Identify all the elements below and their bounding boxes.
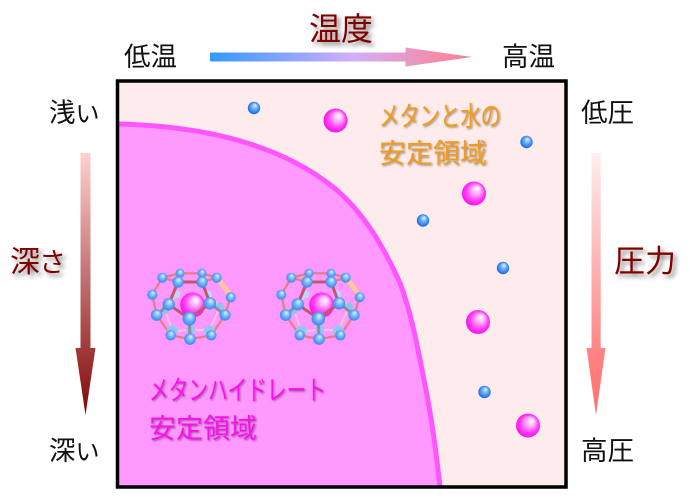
text: methane and water stable region bbox=[379, 102, 501, 169]
water molecules bbox=[248, 102, 533, 398]
text: hydrate stable region: 安定領域 bbox=[149, 414, 257, 444]
text: methane and water stable region: メタンと水の bbox=[379, 102, 501, 132]
methane molecules bbox=[324, 108, 540, 438]
label: high temperature: 高温 bbox=[502, 42, 555, 72]
label: low pressure: 低圧 bbox=[581, 98, 634, 128]
arrow: pressure bbox=[586, 153, 606, 415]
label: high pressure: 高圧 bbox=[581, 436, 634, 466]
title: temperature: 温度 bbox=[309, 11, 373, 47]
label: low temperature: 低温 bbox=[124, 42, 177, 72]
text: methane and water stable region: 安定領域 bbox=[379, 139, 487, 169]
label: deep: 深い bbox=[49, 436, 100, 466]
region: hydrate stability bbox=[118, 124, 440, 487]
title: depth: 深さ bbox=[10, 246, 66, 279]
title: pressure: 圧力 bbox=[614, 244, 676, 279]
text: hydrate stable region: メタンハイドレート bbox=[149, 376, 326, 406]
arrow: depth bbox=[76, 153, 96, 415]
label: shallow: 浅い bbox=[49, 98, 100, 128]
panel: phase diagram bbox=[118, 81, 566, 487]
icon: hydrate cage left bbox=[147, 269, 236, 345]
arrow: temperature bbox=[210, 48, 472, 66]
icon: hydrate cage right bbox=[276, 269, 365, 345]
text: hydrate stable region bbox=[149, 376, 326, 444]
